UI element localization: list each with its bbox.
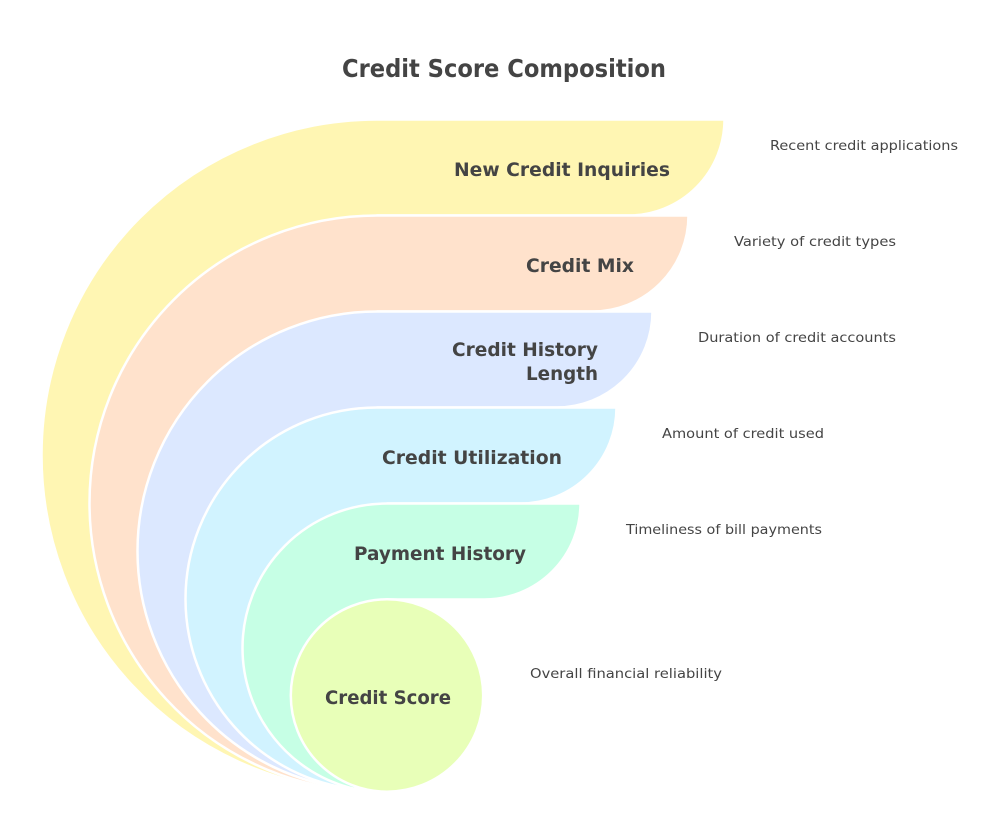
description: New Credit Inquiries: Recent credit applications (770, 138, 958, 154)
segment: New Credit Inquiries: New Credit Inquiries (454, 159, 670, 181)
description: Credit History Length: Duration of credit accounts (698, 330, 896, 346)
segment: Payment History: Payment History (354, 543, 527, 565)
segment: Payment History (242, 504, 580, 789)
segment: Credit Mix: Credit Mix (526, 255, 634, 277)
description: Credit Score: Overall financial reliability (530, 666, 722, 682)
description: Payment History: Timeliness of bill payments (625, 522, 822, 538)
segment: Credit Score: Credit Score (325, 687, 451, 709)
segment: Credit Score (291, 599, 483, 792)
segment: Credit Utilization: Credit Utilization (382, 447, 562, 469)
description: Credit Utilization: Amount of credit used (662, 426, 824, 442)
title: Credit Score Composition (342, 54, 666, 83)
segment: Credit Utilization (186, 408, 616, 789)
description: Credit Mix: Variety of credit types (734, 234, 896, 250)
segment: Credit History Length: Credit History (452, 339, 599, 361)
segment: Credit History Length: Length (526, 363, 598, 385)
segment: Credit History Length (138, 312, 652, 790)
